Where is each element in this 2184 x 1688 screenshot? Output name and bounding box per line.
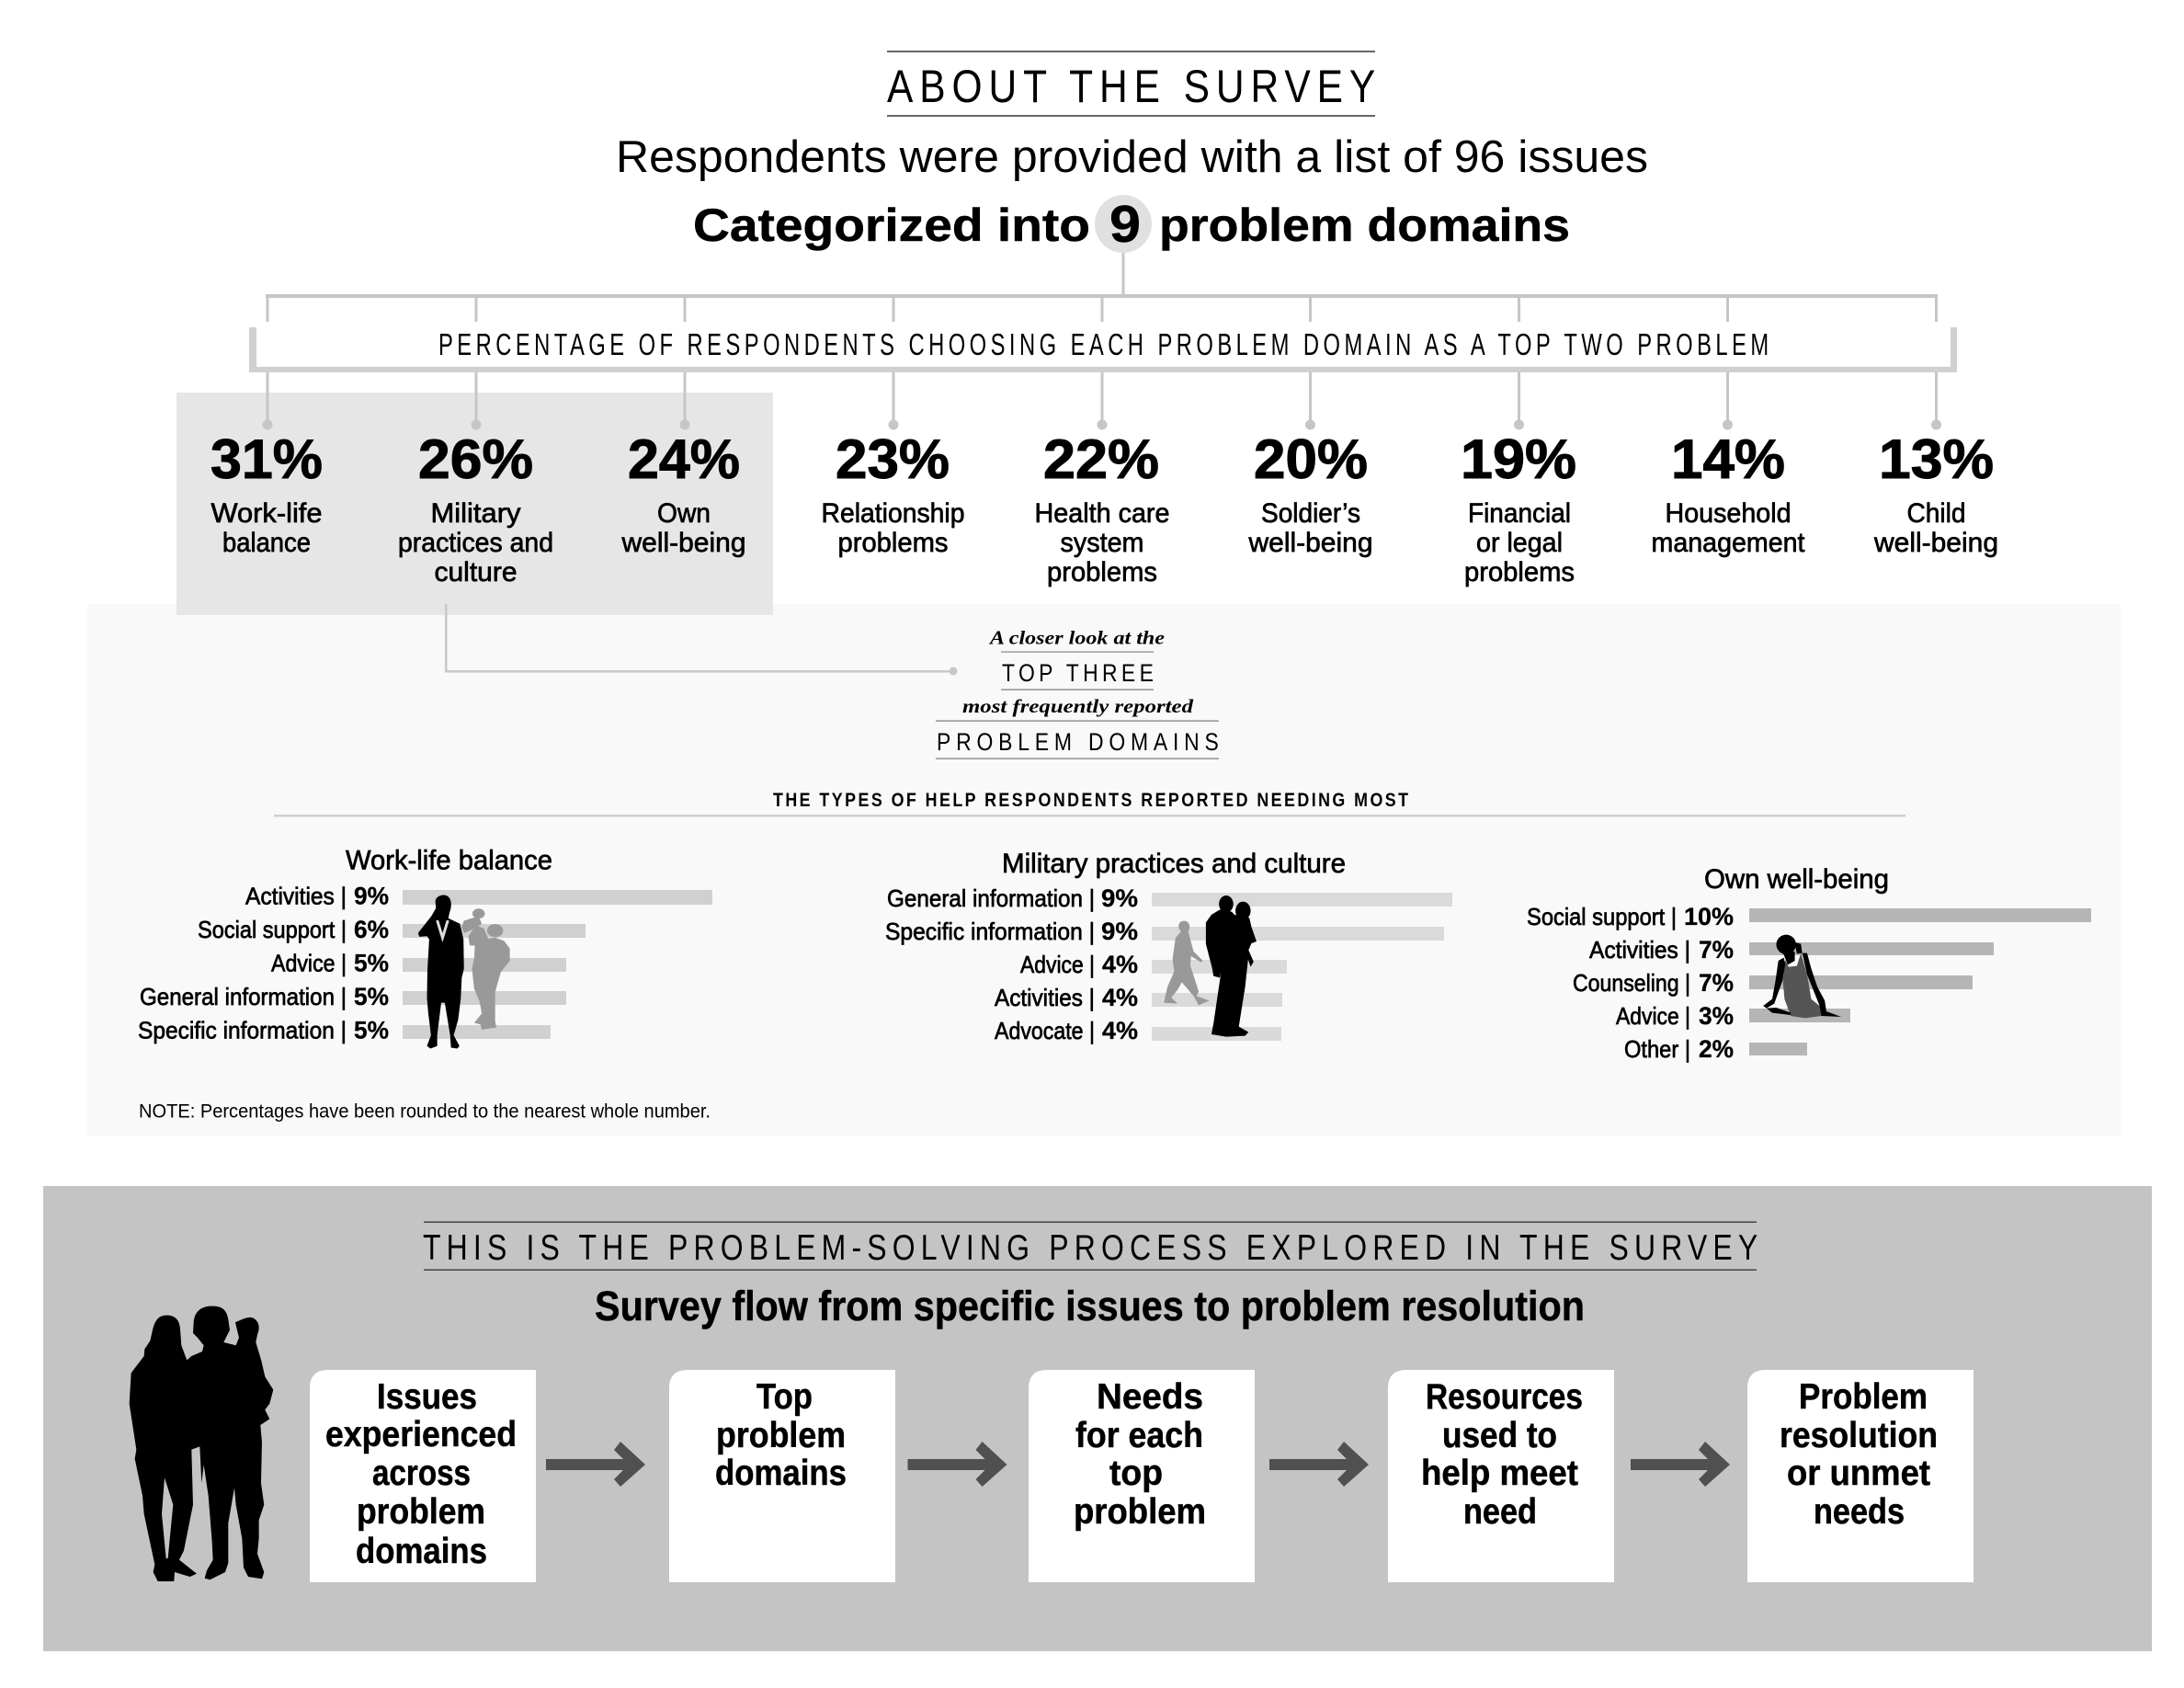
arrow 2: [908, 1442, 1007, 1487]
heading: types of help: THE TYPES OF HELP RESPONDENTS REPORTED NEEDING MOST: [773, 790, 1408, 811]
icon: soldier lifting child: [461, 908, 510, 1030]
panel: problem-solving process: [43, 1186, 2152, 1651]
row: social support 6%: Social support |: [198, 916, 347, 943]
row: advocate 4%: Advocate |: [995, 1017, 1095, 1044]
domain: military practices and culture 26%: Military: [430, 498, 520, 529]
panel: top three highlight: [176, 393, 773, 615]
flow box: needs for each top problem: problem: [1074, 1492, 1206, 1532]
domain: relationship problems 23%: problems: [838, 528, 949, 558]
domain: child well-being 13%: Child: [1906, 498, 1965, 529]
flow box: resources used: need: [1463, 1492, 1537, 1532]
chart: own well-being: [1527, 864, 2091, 1063]
domain: work-life balance 31%: 31%: [210, 428, 323, 490]
chart: military practices and culture: [885, 849, 1452, 1044]
row: advice 4%: Advice |: [1020, 951, 1095, 978]
domain: household management 14%: 14%: [1671, 428, 1785, 490]
flow box: issues experienced: [310, 1370, 536, 1582]
row: advice 3%: [1616, 1002, 1850, 1030]
domain: financial or legal problems 19%: 19%: [1461, 428, 1576, 490]
row: social support 6%: [198, 916, 586, 943]
domain: work-life balance 31%: [210, 428, 323, 558]
chart title: Military practices and culture: [1002, 849, 1346, 879]
row: general information 5%: 5%: [354, 983, 389, 1010]
flow box: top problem domains: domains: [715, 1454, 847, 1493]
row: specific information 9%: Specific information |: [885, 918, 1095, 945]
row: specific information 9%: 9%: [1101, 918, 1138, 945]
domain: soldier's well-being 20%: [1248, 428, 1373, 558]
row: general information 5%: [140, 983, 566, 1010]
row: activities 7%: Activities |: [1589, 936, 1690, 964]
heading: closer look at the top three: TOP THREE: [1002, 659, 1154, 687]
heading: categorized into 9 problem domains: 9: [1109, 195, 1141, 254]
row: activities 9%: [245, 883, 712, 910]
connector tree: nine domains: [263, 253, 1941, 430]
arrow 1: [546, 1442, 645, 1487]
domain: soldier's well-being 20%: Soldier’s: [1261, 498, 1360, 529]
row: other 2%: 2%: [1699, 1035, 1734, 1063]
flow box: needs for each top problem: [1029, 1370, 1255, 1582]
domain: soldier's well-being 20%: 20%: [1254, 428, 1368, 490]
domain: health care system problems 22%: problems: [1047, 557, 1157, 587]
flow box: resources used: used to: [1442, 1416, 1557, 1455]
heading: closer look at the top three: most frequently reported: [962, 695, 1194, 717]
icon: seated woman: [1763, 935, 1841, 1018]
domain: health care system problems 22%: Health care: [1035, 498, 1169, 529]
domain: own well-being 24%: well-being: [621, 528, 746, 558]
row: general information 5%: General information |: [140, 983, 347, 1010]
domain: own well-being 24%: [621, 428, 746, 558]
row: advice 4%: 4%: [1102, 951, 1138, 978]
row: specific information 5%: Specific information |: [138, 1017, 347, 1044]
row: advice 5%: 5%: [354, 949, 389, 976]
row: advice 3%: Advice |: [1616, 1002, 1690, 1030]
heading: problem-solving process: THIS IS THE PROBLEM-SOLVING PROCESS EXPLORED IN THE SURVEY: [423, 1227, 1757, 1268]
row: counseling 7%: Counseling |: [1573, 969, 1690, 997]
domain: health care system problems 22%: 22%: [1043, 428, 1159, 490]
row: specific information 9%: [885, 918, 1444, 945]
row: other 2%: Other |: [1624, 1035, 1690, 1063]
row: activities 4%: Activities |: [995, 984, 1095, 1011]
chart title: Own well-being: [1704, 864, 1889, 895]
domain: military practices and culture 26%: 26%: [418, 428, 533, 490]
flow box: problem resolution: Problem: [1799, 1377, 1928, 1417]
icon: man carrying child: [1206, 895, 1257, 1037]
row: other 2%: [1624, 1035, 1807, 1063]
domain: relationship problems 23%: [822, 428, 965, 558]
row: activities 7%: [1589, 936, 1994, 964]
row: advocate 4%: [995, 1017, 1281, 1044]
flow box: issues experienced: across: [372, 1454, 471, 1493]
connector: highlight to closer look: [445, 604, 958, 675]
heading: closer look at the top three: PROBLEM DOMAINS: [937, 728, 1219, 756]
note: rounding: NOTE: Percentages have been rounded to the nearest whole number.: [139, 1101, 711, 1122]
icon: military family silhouette: [130, 1306, 273, 1581]
flow box: needs for each top problem: Needs: [1097, 1377, 1203, 1417]
banner: percentage of respondents: PERCENTAGE OF RESPONDENTS CHOOSING EACH PROBLEM DOMAIN AS A TOP TWO PROBLEM: [438, 328, 1769, 362]
row: advice 4%: [1020, 951, 1287, 978]
heading: closer look at the top three: A closer look at the: [988, 627, 1165, 649]
domain: relationship problems 23%: 23%: [836, 428, 950, 490]
domain: relationship problems 23%: Relationship: [822, 498, 965, 529]
flow box: resources used: help meet: [1421, 1454, 1578, 1493]
domain: financial or legal problems 19%: Financial: [1468, 498, 1571, 529]
row: social support 10%: Social support |: [1527, 903, 1677, 930]
chart: work-life balance: [138, 846, 712, 1048]
domain: child well-being 13%: 13%: [1879, 428, 1994, 490]
flow box: problem resolution: [1747, 1370, 1974, 1582]
row: social support 10%: [1527, 903, 2091, 930]
row: activities 9%: Activities |: [245, 883, 347, 910]
flow box: needs for each top problem: top: [1109, 1454, 1163, 1493]
domain: work-life balance 31%: Work-life: [211, 498, 322, 529]
row: advice 5%: Advice |: [271, 949, 347, 976]
row: counseling 7%: [1573, 969, 1973, 997]
domain: financial or legal problems 19%: or legal: [1476, 528, 1563, 558]
row: social support 10%: 10%: [1684, 903, 1734, 930]
domain: soldier's well-being 20%: well-being: [1248, 528, 1373, 558]
domain: own well-being 24%: Own: [657, 498, 711, 529]
heading: closer look at the top three: [936, 627, 1219, 759]
flow box: top problem domains: Top: [756, 1377, 813, 1417]
domain: own well-being 24%: 24%: [628, 428, 740, 490]
icon: businesswoman on phone: [418, 895, 464, 1048]
flow box: issues experienced: problem: [357, 1492, 485, 1532]
flow box: resources used: [1388, 1370, 1614, 1582]
row: specific information 5%: [138, 1017, 551, 1044]
subheading: survey flow: Survey flow from specific issues to problem resolution: [595, 1283, 1585, 1329]
domain: military practices and culture 26%: culture: [434, 557, 517, 587]
arrow 4: [1631, 1442, 1730, 1487]
flow box: issues experienced: experienced: [325, 1415, 517, 1454]
row: social support 6%: 6%: [354, 916, 389, 943]
domain: financial or legal problems 19%: [1461, 428, 1576, 587]
flow box: top problem domains: problem: [716, 1416, 846, 1455]
row: activities 9%: 9%: [354, 883, 389, 910]
row: general information 9%: General information |: [887, 884, 1095, 912]
row: counseling 7%: 7%: [1699, 969, 1734, 997]
chart title: Work-life balance: [346, 846, 552, 875]
flow box: problem resolution: resolution: [1780, 1416, 1938, 1455]
domain: child well-being 13%: [1873, 428, 1998, 558]
domain: health care system problems 22%: [1035, 428, 1169, 587]
domain: financial or legal problems 19%: problems: [1464, 557, 1575, 587]
arrow 3: [1269, 1442, 1369, 1487]
row: advocate 4%: 4%: [1102, 1017, 1138, 1044]
row: activities 4%: [995, 984, 1282, 1011]
flow box: resources used: Resources: [1426, 1377, 1583, 1417]
row: general information 9%: [887, 884, 1452, 912]
banner: percentage of respondents: [249, 322, 1957, 372]
row: specific information 5%: 5%: [354, 1017, 389, 1044]
domain: household management 14%: [1651, 428, 1805, 558]
row: advice 3%: 3%: [1699, 1002, 1734, 1030]
row: activities 4%: 4%: [1102, 984, 1138, 1011]
domain: military practices and culture 26%: [398, 428, 553, 587]
domain: work-life balance 31%: balance: [222, 528, 311, 558]
flow box: top problem domains: [669, 1370, 895, 1582]
heading: categorized into 9 problem domains: Categorized into: [693, 200, 1090, 251]
flow box: issues experienced: domains: [356, 1532, 487, 1571]
flow box: issues experienced: Issues: [377, 1377, 477, 1417]
heading: about the survey: ABOUT THE SURVEY: [887, 61, 1375, 112]
text: respondents intro: Respondents were provided with a list of 96 issues: [616, 132, 1648, 182]
flow box: problem resolution: needs: [1814, 1492, 1905, 1532]
domain: household management 14%: Household: [1666, 498, 1791, 529]
row: advice 5%: [271, 949, 566, 976]
row: activities 7%: 7%: [1699, 936, 1734, 964]
flow box: problem resolution: or unmet: [1787, 1454, 1930, 1493]
heading: categorized into 9 problem domains: problem domains: [1159, 200, 1570, 251]
panel: top three closer look background: [87, 604, 2121, 1135]
heading: categorized into 9 problem domains: [693, 195, 1570, 254]
domain: child well-being 13%: well-being: [1873, 528, 1998, 558]
domain: household management 14%: management: [1651, 528, 1805, 558]
icon: woman walking: [1164, 921, 1210, 1005]
row: general information 9%: 9%: [1101, 884, 1138, 912]
domain: health care system problems 22%: system: [1061, 528, 1143, 558]
domain: military practices and culture 26%: practices and: [398, 528, 553, 558]
flow box: needs for each top problem: for each: [1075, 1416, 1203, 1455]
